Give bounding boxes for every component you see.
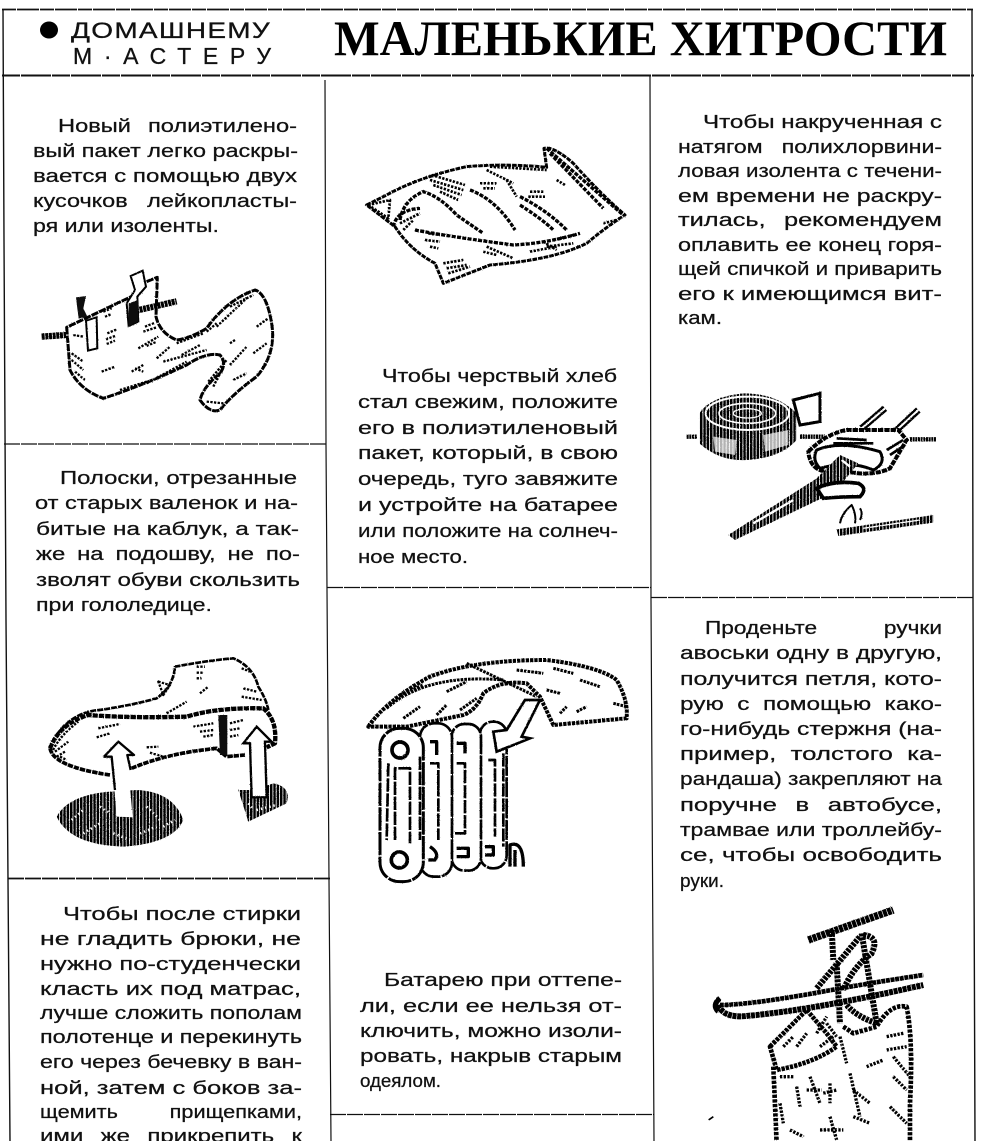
text block: string bag tip: рую с помощью како-: [680, 694, 942, 714]
text block: trousers tip: не гладить брюки, не: [40, 929, 301, 949]
text block: string bag tip: получится петля, кото-: [680, 669, 942, 689]
text block: insulating tape tip: кам.: [678, 308, 722, 328]
text block: felt soles tip: зволят обуви скользить: [36, 570, 300, 590]
heading: rubric: М·АСТЕРУ: [73, 43, 271, 69]
text block: stale bread tip: или положите на солнеч-: [358, 521, 618, 541]
text block: string bag tip: трамвае или троллейбу-: [680, 820, 942, 840]
text block: trousers tip: нужно по-студенчески: [40, 954, 301, 974]
text block: stale bread tip: стал свежим, положите: [358, 392, 618, 412]
text block: string bag tip: руки.: [680, 871, 724, 891]
text block: radiator tip: одеялом.: [360, 1071, 441, 1091]
text block: stale bread tip: [358, 366, 618, 567]
text block: insulating tape tip: ловая изолента с течени-: [678, 161, 942, 181]
text block: trousers tip: полотенце и перекинуть: [40, 1027, 302, 1047]
icon: string bag on handrail: [709, 910, 923, 1141]
text block: stale bread tip: и устройте на батарее: [358, 495, 618, 515]
text block: plastic bag tip: кусочков лейкопласты-: [33, 191, 297, 211]
text block: trousers tip: класть их под матрас,: [40, 979, 301, 999]
text block: string bag tip: Проденьте ручки: [705, 618, 942, 638]
text block: stale bread tip: его в полиэтиленовый: [358, 418, 618, 438]
heading: rubric: ДОМАШНЕМУ: [71, 18, 271, 43]
icon: radiator under blanket: [368, 660, 627, 882]
heading: rubric: [40, 18, 271, 69]
text block: insulating tape tip: тилась, рекомендуем: [678, 210, 942, 230]
text block: plastic bag tip: Новый полиэтилено-: [58, 116, 297, 136]
text block: stale bread tip: ное место.: [358, 547, 468, 567]
text block: felt soles tip: же на подошву, не по-: [36, 544, 300, 564]
icon: tape roll, plug and match: [687, 393, 937, 540]
text block: felt soles tip: Полоски, отрезанные: [60, 468, 297, 488]
text block: trousers tip: щемить прищепками,: [40, 1102, 302, 1122]
text block: radiator tip: Батарею при оттепе-: [384, 970, 622, 990]
title: МАЛЕНЬКИЕ ХИТРОСТИ: [334, 10, 947, 66]
text block: stale bread tip: Чтобы черствый хлеб: [382, 366, 617, 386]
text block: radiator tip: ли, если ее нельзя от-: [360, 996, 622, 1016]
text block: radiator tip: [360, 970, 622, 1091]
text block: insulating tape tip: натягом полихлорвини-: [678, 137, 942, 157]
icon: bullet: [40, 22, 58, 38]
text block: string bag tip: рандаша) закрепляют на: [680, 769, 943, 789]
text block: insulating tape tip: щей спичкой и приварить: [678, 259, 942, 279]
text block: insulating tape tip: оплавить ее конец горя-: [678, 235, 942, 255]
text block: string bag tip: авоськи одну в другую,: [680, 643, 942, 663]
text block: trousers tip: [40, 904, 302, 1141]
text block: felt soles tip: от старых валенок и на-: [35, 493, 298, 513]
text block: insulating tape tip: Чтобы накрученная с: [703, 112, 942, 132]
text block: plastic bag tip: вый пакет легко раскры-: [33, 141, 298, 161]
text block: radiator tip: ключить, можно изоли-: [360, 1021, 622, 1041]
text block: radiator tip: ровать, накрыв старым: [360, 1046, 622, 1066]
text block: trousers tip: лучше сложить пополам: [40, 1003, 302, 1023]
text block: insulating tape tip: [678, 112, 942, 328]
text block: insulating tape tip: его к имеющимся вит-: [678, 284, 942, 304]
text block: string bag tip: [680, 618, 943, 891]
text block: trousers tip: его через бечевку в ван-: [40, 1052, 302, 1072]
icon: boot with felt pieces and arrows: [50, 658, 288, 847]
text block: stale bread tip: пакет, который, в свою: [358, 443, 618, 463]
text block: felt soles tip: при гололедице.: [36, 595, 212, 615]
text block: string bag tip: го-нибудь стержня (на-: [680, 719, 942, 739]
text block: string bag tip: пример, толстого ка-: [680, 744, 942, 764]
text block: stale bread tip: очередь, туго завяжите: [358, 469, 618, 489]
text block: plastic bag tip: ря или изоленты.: [33, 216, 219, 236]
text block: string bag tip: се, чтобы освободить: [680, 845, 942, 865]
text block: string bag tip: поручне в автобусе,: [680, 795, 942, 815]
text block: felt soles tip: битые на каблук, а так-: [36, 519, 299, 539]
text block: plastic bag tip: вается с помощью двух: [33, 166, 297, 186]
icon: bread in plastic bag: [367, 148, 625, 283]
icon: plastic bag with tape tabs: [42, 271, 273, 411]
text block: plastic bag tip: [33, 116, 298, 236]
text block: trousers tip: Чтобы после стирки: [63, 904, 301, 924]
text block: felt soles tip: [35, 468, 300, 615]
text block: insulating tape tip: ем времени не раскру-: [678, 186, 942, 206]
text block: trousers tip: ной, затем с боков за-: [40, 1078, 302, 1098]
